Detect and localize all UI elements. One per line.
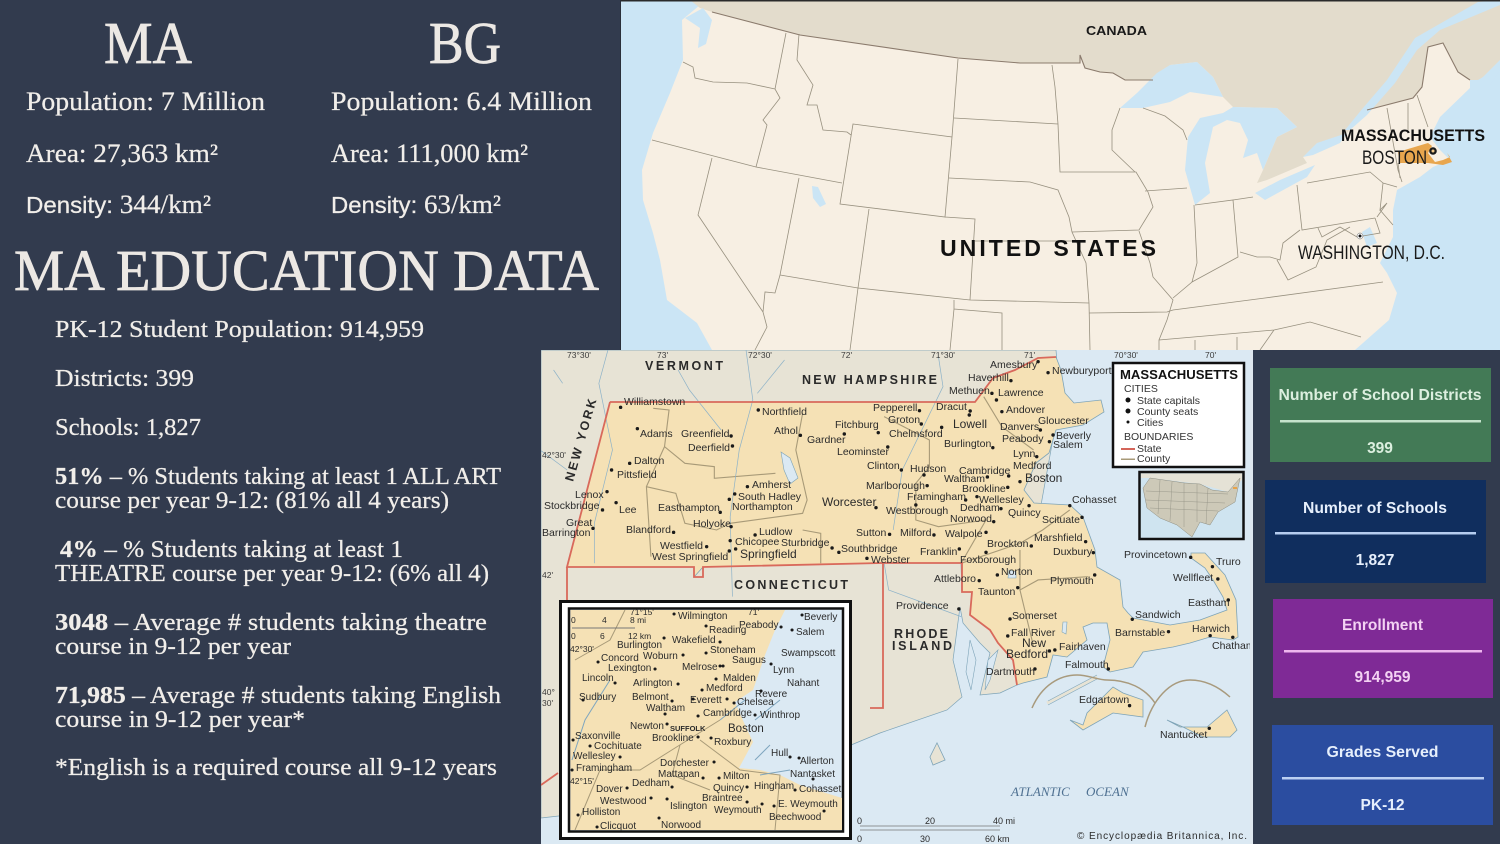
map inset: Boston area: Cambridge xyxy=(703,708,752,719)
map inset: Boston area xyxy=(560,602,850,838)
map inset: Boston area: Weymouth xyxy=(714,805,762,816)
map legend: BOUNDARIES xyxy=(1124,431,1193,443)
stat card: enrollment xyxy=(1273,599,1493,698)
city labels: Quincy xyxy=(1008,507,1041,519)
map inset: Boston area: 42°30' xyxy=(570,644,594,654)
stat card: number of schools xyxy=(1265,480,1486,583)
map inset: Boston area: Beverly xyxy=(804,612,837,623)
coordinate labels: 73°30' xyxy=(567,350,591,360)
text block: education data list: Districts: 399 xyxy=(55,366,194,392)
city labels: Bedford xyxy=(1006,647,1048,661)
coordinate labels: 73' xyxy=(657,350,668,360)
stat card: number of schools: 1,827 xyxy=(1356,552,1394,569)
text block: BG facts: Density: 63/km² xyxy=(331,190,501,219)
city labels: Dracut xyxy=(936,401,967,413)
city labels: Chatham xyxy=(1212,640,1255,652)
text block: education data list: 3048 – Average # students taking theatre xyxy=(55,610,487,636)
city labels: Framingham xyxy=(907,491,966,503)
city labels: Attleboro xyxy=(934,573,976,585)
map inset: Boston area: Clicquot xyxy=(600,821,636,832)
coordinate labels: 72' xyxy=(841,350,852,360)
city labels: Northampton xyxy=(732,501,793,513)
city labels: Somerset xyxy=(1012,610,1057,622)
map scale bar: 0 xyxy=(857,816,862,826)
coordinate labels: 70' xyxy=(1205,350,1216,360)
text block: education data list: 71,985 – Average # students taking English xyxy=(55,683,501,709)
city labels: Sutton xyxy=(856,527,887,539)
map inset: Boston area: Lynn xyxy=(773,665,794,676)
city labels: Lowell xyxy=(953,417,987,431)
map inset: Boston area: Wilmington xyxy=(678,611,727,622)
map inset: Boston area: 0 xyxy=(571,631,576,641)
map inset: Boston area: Sudbury xyxy=(579,692,616,703)
text block: education data list: PK-12 Student Population: 914,959 xyxy=(55,317,424,343)
map inset: Boston area: Hull xyxy=(771,748,788,759)
map inset: Boston area: 4 xyxy=(602,615,607,625)
city labels: Sandwich xyxy=(1135,609,1181,621)
coordinate labels: 42°30' xyxy=(542,450,566,460)
map scale bar: 30 xyxy=(920,834,930,844)
map legend: County seats xyxy=(1137,406,1198,418)
map inset: Boston area: Everett xyxy=(690,695,722,706)
city labels: Medford xyxy=(1013,460,1052,472)
city labels: Lynn xyxy=(1013,448,1036,460)
stat card: number of school districts: 399 xyxy=(1367,440,1393,457)
panel: US map: CANADA xyxy=(1086,23,1148,38)
city labels: Truro xyxy=(1216,556,1241,568)
map inset: Boston area: Milton xyxy=(723,771,750,782)
city labels: Fall River xyxy=(1011,627,1056,639)
map inset: Boston area: Woburn xyxy=(643,651,678,662)
city labels: Salem xyxy=(1053,439,1083,451)
coordinate labels: 71°30' xyxy=(931,350,955,360)
map inset: Boston area: Holliston xyxy=(582,807,620,818)
city labels: Norwood xyxy=(950,513,992,525)
city labels: Northfield xyxy=(762,406,807,418)
map inset: Boston area: Reading xyxy=(709,625,746,636)
city labels: Cambridge xyxy=(959,465,1011,477)
city labels: Cohasset xyxy=(1072,494,1116,506)
coordinate labels xyxy=(542,350,1216,708)
city labels: Worcester xyxy=(822,495,876,509)
city labels: Westfield xyxy=(660,540,703,552)
city labels: Waltham xyxy=(944,473,985,485)
map scale bar: 0 xyxy=(857,834,862,844)
city labels: Easthampton xyxy=(658,502,720,514)
map inset: Boston area: 0 xyxy=(571,615,576,625)
city labels: Dartmouth xyxy=(986,666,1035,678)
city labels: Groton xyxy=(888,414,920,426)
city labels: Milford xyxy=(900,527,932,539)
state labels xyxy=(562,359,952,653)
text block: MA facts: Area: 27,363 km² xyxy=(26,139,218,168)
map inset: Boston area: 8 mi xyxy=(630,615,646,625)
panel: right sidebar xyxy=(1250,350,1500,844)
city labels: Barrington xyxy=(542,527,591,539)
ocean label: OCEAN xyxy=(1086,784,1130,799)
city labels: Lee xyxy=(619,504,637,516)
panel: US map: MASSACHUSETTS xyxy=(1341,126,1485,145)
map inset: Boston area: Dedham xyxy=(632,778,670,789)
map legend: MASSACHUSETTS xyxy=(1120,368,1238,382)
text block: education data list: course in 9-12 per year* xyxy=(55,707,305,733)
map legend: County xyxy=(1137,453,1171,465)
city labels: Amherst xyxy=(752,479,791,491)
city labels: Brockton xyxy=(987,538,1029,550)
coordinate labels: 70°30' xyxy=(1114,350,1138,360)
text block: BG facts xyxy=(331,87,592,219)
city labels: Fairhaven xyxy=(1059,641,1106,653)
city labels: Fitchburg xyxy=(835,419,879,431)
city labels: Beverly xyxy=(1056,430,1092,442)
map scale bar: 20 xyxy=(925,816,935,826)
map inset: Boston area: Roxbury xyxy=(714,737,751,748)
city labels: Webster xyxy=(871,554,910,566)
map inset: Boston area: Concord xyxy=(601,653,639,664)
map inset: Boston area: Norwood xyxy=(661,820,701,831)
city labels: Marshfield xyxy=(1034,532,1083,544)
map inset: Boston area: Peabody xyxy=(739,620,778,631)
panel: US map: UNITED STATES xyxy=(940,235,1159,261)
text block: BG facts: Population: 6.4 Million xyxy=(331,87,592,116)
panel: US map: BOSTON xyxy=(1362,148,1427,169)
text block: education data list: THEATRE course per year 9-12: (6% all 4) xyxy=(55,561,489,587)
city labels: Boston xyxy=(1025,471,1062,485)
city labels: Norton xyxy=(1001,566,1033,578)
map inset: Boston area: SUFFOLK xyxy=(670,724,706,733)
city labels: Blandford xyxy=(626,524,671,536)
ocean label: ATLANTIC xyxy=(1010,784,1070,799)
map scale bar xyxy=(857,816,1015,844)
city labels: Peabody xyxy=(1002,433,1044,445)
map legend: CITIES xyxy=(1124,383,1158,395)
coordinate labels: 72°30' xyxy=(748,350,772,360)
map inset: Boston area: Framingham xyxy=(576,763,632,774)
city labels: Foxborough xyxy=(960,554,1016,566)
text block: education data list: 4% – % Students taking at least 1 xyxy=(60,537,403,563)
stat card: enrollment: Enrollment xyxy=(1342,617,1423,634)
map inset: Boston area: Lincoln xyxy=(582,673,614,684)
map inset: Boston area: 71' xyxy=(748,607,759,617)
map legend xyxy=(1113,363,1244,467)
city labels: Haverhill xyxy=(968,372,1009,384)
city labels: South Hadley xyxy=(738,491,802,503)
text block: BG facts: Area: 111,000 km² xyxy=(331,139,528,168)
map scale bar: 60 km xyxy=(985,834,1010,844)
text block: MA facts: Population: 7 Million xyxy=(26,87,265,116)
text block: education data list: course in 9-12 per year xyxy=(55,634,291,660)
city labels: Greenfield xyxy=(681,428,730,440)
city labels: Sturbridge xyxy=(781,537,830,549)
panel: US map xyxy=(620,0,1500,351)
map inset: Boston area: Revere xyxy=(755,689,788,700)
panel: US map: WASHINGTON, D.C. xyxy=(1298,242,1445,264)
city labels: Plymouth xyxy=(1050,575,1094,587)
city labels: Marlborough xyxy=(866,480,925,492)
city labels: Scituate xyxy=(1042,514,1080,526)
city labels: Brookline xyxy=(962,483,1006,495)
city labels: New xyxy=(1022,636,1046,650)
stat card: number of school districts xyxy=(1270,368,1491,462)
map inset: Boston area: Malden xyxy=(723,673,756,684)
map inset: Boston area: Saxonville xyxy=(575,731,621,742)
map inset: Boston area: Melrose xyxy=(682,662,718,673)
map legend: Cities xyxy=(1137,417,1163,429)
city labels: Eastham xyxy=(1188,597,1230,609)
map inset: Boston area: Hingham xyxy=(754,781,794,792)
city labels: Chicopee xyxy=(735,536,780,548)
map inset: Boston area: Newton xyxy=(630,721,664,732)
map inset: Boston area: Brookline xyxy=(652,733,694,744)
city labels: Walpole xyxy=(945,528,983,540)
map inset: Boston area: Dorchester xyxy=(660,758,710,769)
copyright: © Encyclopædia Britannica, Inc. xyxy=(1077,831,1247,842)
city labels: Great xyxy=(566,517,592,529)
city labels: Harwich xyxy=(1192,623,1230,635)
city labels: Clinton xyxy=(867,460,900,472)
map inset: Boston area: Mattapan xyxy=(658,769,700,780)
map inset: Boston area: Wakefield xyxy=(672,635,716,646)
map inset: Boston area: Quincy xyxy=(713,783,744,794)
map inset: Boston area: Lexington xyxy=(608,663,651,674)
city labels: Newburyport xyxy=(1052,365,1112,377)
city labels: Williamstown xyxy=(624,396,685,408)
map inset: Boston area: 71°15' xyxy=(630,607,654,617)
text block: MA facts: Density: 344/km² xyxy=(26,190,211,219)
map inset: Boston area: Salem xyxy=(796,627,824,638)
city labels: Pittsfield xyxy=(617,469,657,481)
city labels: Wellesley xyxy=(979,494,1024,506)
city labels: Adams xyxy=(640,428,673,440)
city labels: Pepperell xyxy=(873,402,917,414)
city labels: Lawrence xyxy=(998,387,1044,399)
map inset: Boston area: Cohasset xyxy=(799,784,841,795)
state labels: NEW HAMPSHIRE xyxy=(802,373,937,387)
city labels: Methuen xyxy=(949,385,990,397)
city labels: Provincetown xyxy=(1124,549,1187,561)
text block: education data list: *English is a required course all 9-12 years xyxy=(55,755,497,781)
coordinate labels: 40° xyxy=(542,687,555,697)
map inset: Boston area: Beechwood xyxy=(769,812,821,823)
map inset: Boston area: 12 km xyxy=(628,631,651,641)
city labels: Taunton xyxy=(978,586,1016,598)
city labels: Lenox xyxy=(575,489,604,501)
text block: education data list: Schools: 1,827 xyxy=(55,415,201,441)
city labels: Southbridge xyxy=(841,543,898,555)
map inset: Boston area: Westwood xyxy=(600,796,647,807)
map inset: Boston area: Winthrop xyxy=(760,710,800,721)
map inset: Boston area: E. Weymouth xyxy=(778,799,838,810)
state labels: RHODE xyxy=(894,627,948,641)
map scale bar: 40 mi xyxy=(993,816,1015,826)
stat card: grades served: Grades Served xyxy=(1326,744,1438,761)
stat card: number of school districts: Number of School Districts xyxy=(1278,387,1482,404)
map inset: Boston area: Belmont xyxy=(632,692,669,703)
coordinate labels: 30' xyxy=(542,698,553,708)
city labels: Barnstable xyxy=(1115,627,1165,639)
map inset: Boston area: Allerton xyxy=(800,756,834,767)
coordinate labels: 42' xyxy=(542,570,553,580)
heading: BG: BG xyxy=(429,10,501,76)
map legend: State capitals xyxy=(1137,395,1200,407)
map inset: Boston area: Burlington xyxy=(617,640,662,651)
city labels: Duxbury xyxy=(1053,546,1093,558)
stat card: grades served: PK-12 xyxy=(1361,797,1404,814)
city labels: Edgartown xyxy=(1079,694,1129,706)
map legend: State xyxy=(1137,443,1162,455)
heading: MA: MA xyxy=(104,10,192,76)
city labels: Ludlow xyxy=(759,526,793,538)
stat card: enrollment: 914,959 xyxy=(1354,669,1411,686)
city labels: Burlington xyxy=(944,438,991,450)
city labels: Dalton xyxy=(634,455,665,467)
state labels: CONNECTICUT xyxy=(734,578,848,592)
city labels: Providence xyxy=(896,600,949,612)
map inset: Boston area: Arlington xyxy=(633,678,672,689)
ocean label xyxy=(1010,784,1130,799)
text block: education data list: 51% – % Students taking at least 1 ALL ART xyxy=(55,464,501,490)
city labels: Andover xyxy=(1006,404,1046,416)
map inset: Boston area: Stoneham xyxy=(710,645,756,656)
map inset: Boston area: Waltham xyxy=(646,703,685,714)
city labels: Franklin xyxy=(920,546,958,558)
city labels: Hudson xyxy=(910,463,946,475)
city labels xyxy=(542,359,1255,741)
heading: MA education data: MA EDUCATION DATA xyxy=(14,238,599,303)
city labels: West Springfield xyxy=(652,551,728,563)
city labels: Gardner xyxy=(807,434,846,446)
map inset: Boston area: Medford xyxy=(706,683,743,694)
city labels: Stockbridge xyxy=(544,500,600,512)
map inset: Boston area: Chelsea xyxy=(737,697,774,708)
map inset: Boston area: 6 xyxy=(600,631,605,641)
map inset: Boston area: 42°15' xyxy=(570,776,594,786)
map inset: Boston area: Dover xyxy=(596,784,623,795)
locator map xyxy=(1140,472,1244,539)
city labels: Nantucket xyxy=(1160,729,1207,741)
map inset: Boston area: Nahant xyxy=(787,678,819,689)
stat card: number of schools: Number of Schools xyxy=(1303,500,1447,517)
city labels: Chelmsford xyxy=(889,428,943,440)
map inset: Boston area: Braintree xyxy=(702,793,743,804)
city labels: Dedham xyxy=(960,502,1000,514)
map inset: Boston area: Boston xyxy=(728,723,764,735)
city labels: Leominster xyxy=(837,446,889,458)
map inset: Boston area: Cochituate xyxy=(594,741,642,752)
city labels: Springfield xyxy=(740,547,797,561)
state labels: ISLAND xyxy=(892,639,952,653)
city labels: Amesbury xyxy=(990,359,1038,371)
map inset: Boston area: Islington xyxy=(670,801,707,812)
text block: education data list xyxy=(55,317,501,781)
text block: MA facts xyxy=(26,87,265,219)
city labels: Westborough xyxy=(886,505,948,517)
panel: Massachusetts map xyxy=(540,350,1255,844)
map inset: Boston area: Nantasket xyxy=(790,769,835,780)
map inset: Boston area: Saugus xyxy=(732,655,766,666)
city labels: Deerfield xyxy=(688,442,730,454)
state labels: VERMONT xyxy=(645,359,723,373)
coordinate labels: 71' xyxy=(1024,350,1035,360)
city labels: Wellfleet xyxy=(1173,572,1213,584)
state labels: NEW YORK xyxy=(562,397,599,483)
stat card: grades served xyxy=(1272,725,1493,825)
city labels: Falmouth xyxy=(1065,659,1109,671)
map inset: Boston area: Swampscott xyxy=(781,648,836,659)
text block: education data list: course per year 9-12: (81% all 4 years) xyxy=(55,488,449,514)
city labels: Danvers xyxy=(1000,421,1039,433)
map inset: Boston area: Wellesley xyxy=(573,751,616,762)
city labels: Athol xyxy=(774,425,798,437)
city labels: Gloucester xyxy=(1038,415,1089,427)
city labels: Holyoke xyxy=(693,518,731,530)
